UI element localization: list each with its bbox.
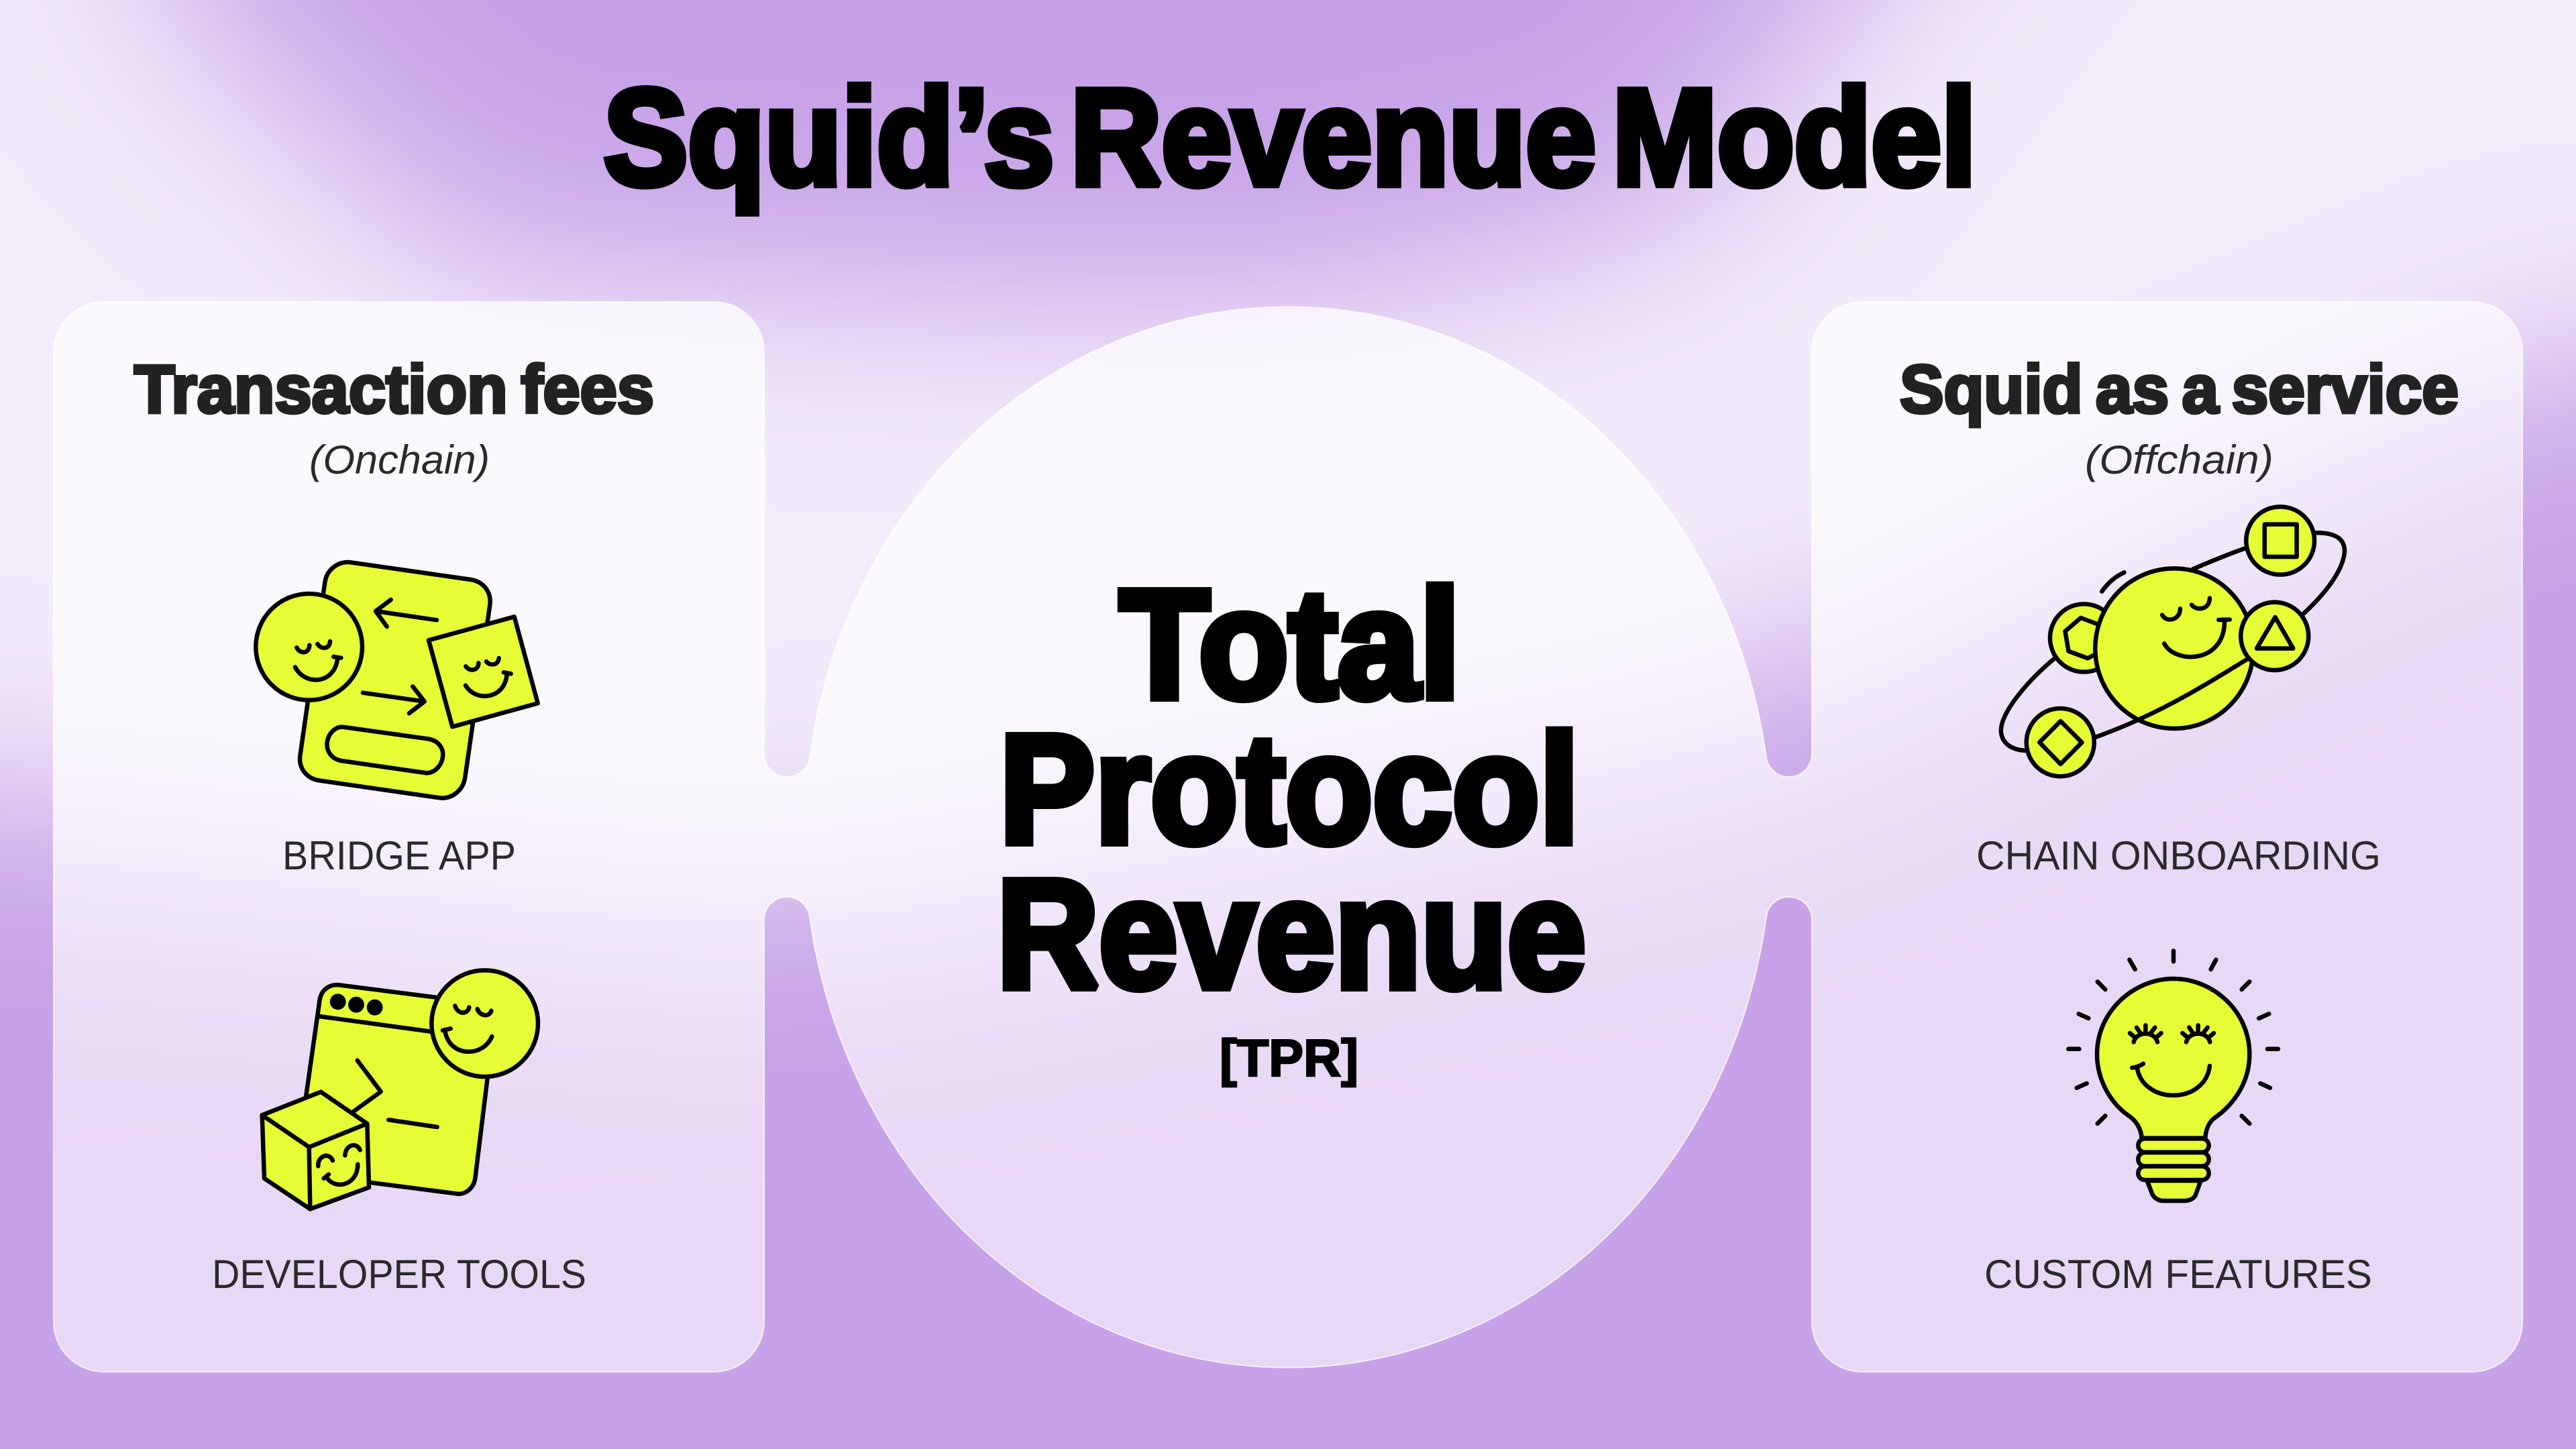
panel heading: transaction fees: Transaction fees xyxy=(134,352,654,427)
label: developer tools: DEVELOPER TOOLS xyxy=(212,1252,586,1297)
label: bridge app: BRIDGE APP xyxy=(282,833,516,878)
panel heading: squid as a service: Squid as a service xyxy=(1900,352,2459,427)
icon: custom features xyxy=(2068,951,2278,1201)
title: Squid’s Revenue Model xyxy=(604,61,1976,214)
center subheading: TPR: [TPR] xyxy=(1220,1028,1358,1087)
panel subheading: onchain: (Onchain) xyxy=(309,437,490,482)
panel subheading: offchain: (Offchain) xyxy=(2085,437,2273,482)
center heading: total protocol revenue: Total xyxy=(1120,557,1460,731)
label: custom features: CUSTOM FEATURES xyxy=(1984,1252,2372,1297)
center heading: total protocol revenue xyxy=(997,557,1586,1020)
icon: chain onboarding xyxy=(2001,506,2345,776)
center heading: total protocol revenue: Revenue xyxy=(997,847,1586,1020)
panel: glass shape joining transaction fees, total revenue circle and squid as a service xyxy=(53,301,2523,1373)
label: chain onboarding: CHAIN ONBOARDING xyxy=(1976,833,2381,878)
icon: developer tools xyxy=(262,970,538,1209)
center heading: total protocol revenue: Protocol xyxy=(1000,702,1579,875)
icon: bridge app xyxy=(256,562,538,798)
